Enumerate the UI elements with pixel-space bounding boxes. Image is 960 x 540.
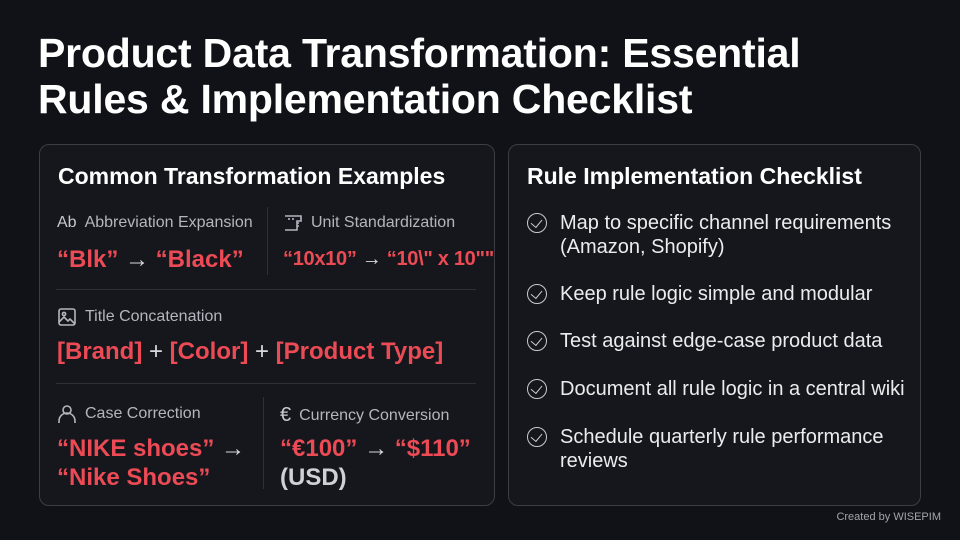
item 1: Map to specific channel requirements xyxy=(560,212,891,234)
value: unit: “10x10” → “10\" x 10"" xyxy=(283,248,494,270)
panel: transformation examples xyxy=(39,144,495,506)
credit: Created by WISEPIM xyxy=(836,511,941,523)
label: currency xyxy=(280,404,449,426)
item 1: (Amazon, Shopify) xyxy=(560,236,725,258)
label: title concatenation: Title Concatenation xyxy=(85,308,222,325)
value: abbreviation: “Blk” → “Black” xyxy=(57,246,244,273)
item 5: Schedule quarterly rule performance xyxy=(560,426,884,448)
item 2: Keep rule logic simple and modular xyxy=(560,283,872,305)
title: Rules & Implementation Checklist xyxy=(38,76,692,122)
title: Product Data Transformation: Essential xyxy=(38,30,800,76)
label: currency: € xyxy=(280,404,291,426)
item 4: Document all rule logic in a central wiki xyxy=(560,378,905,400)
label: abbreviation: Ab xyxy=(57,214,77,231)
item 5 xyxy=(527,426,884,472)
value: currency: “€100” → “$110” xyxy=(280,435,471,462)
label: unit: Unit Standardization xyxy=(311,214,455,231)
item 5: reviews xyxy=(560,450,628,472)
label: currency: Currency Conversion xyxy=(299,406,449,424)
label: abbreviation: Abbreviation Expansion xyxy=(85,214,253,231)
heading: checklist: Rule Implementation Checklist xyxy=(527,163,862,189)
value: currency xyxy=(280,435,471,491)
title xyxy=(38,30,800,122)
value: case correction: “NIKE shoes” → xyxy=(57,435,245,462)
value: title concatenation: [Brand] + [Color] + [Product Type] xyxy=(57,338,443,365)
value: case correction: “Nike Shoes” xyxy=(57,464,210,491)
heading: examples: Common Transformation Examples xyxy=(58,163,445,189)
value: currency: (USD) xyxy=(280,464,347,491)
item 1 xyxy=(527,212,891,258)
label: case correction: Case Correction xyxy=(85,405,201,422)
panel: checklist xyxy=(508,144,921,506)
item 3: Test against edge-case product data xyxy=(560,330,882,352)
value: case correction xyxy=(57,435,245,491)
